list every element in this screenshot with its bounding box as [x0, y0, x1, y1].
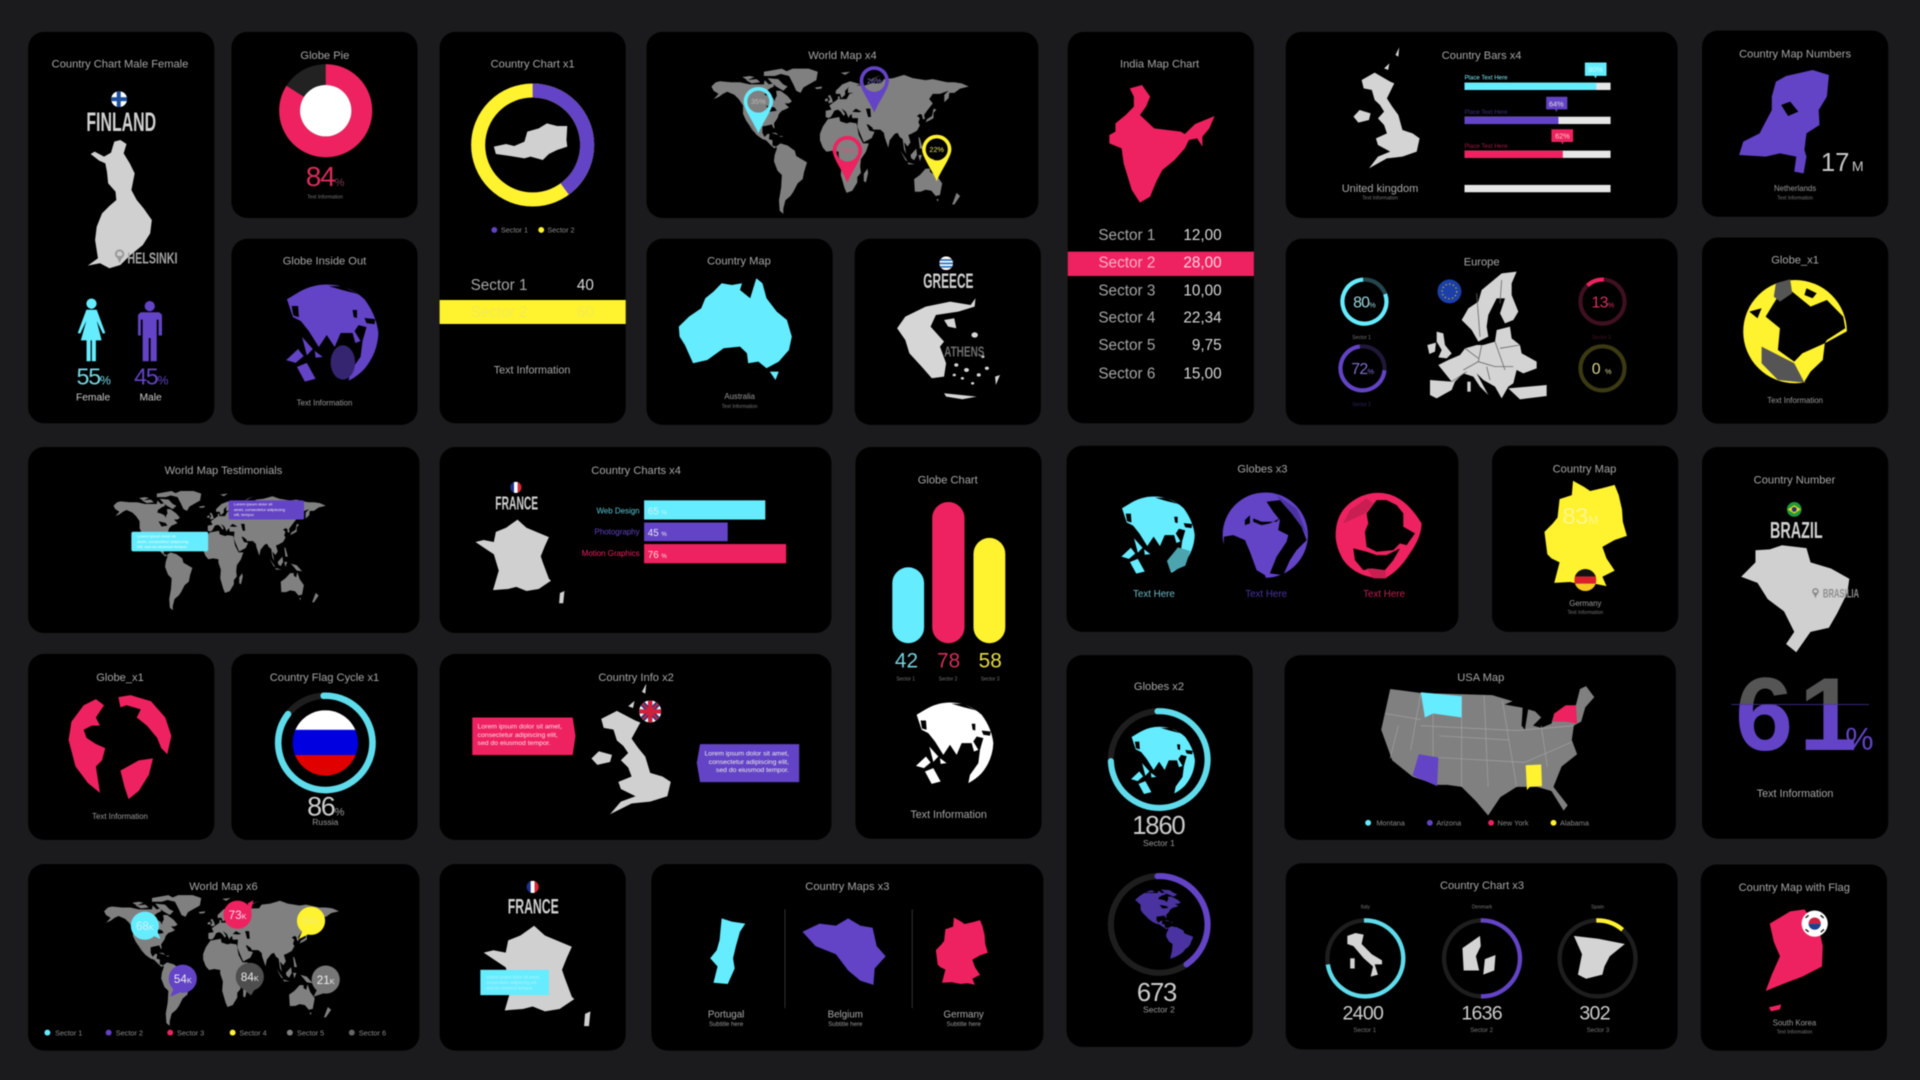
globe: purple	[286, 285, 378, 382]
callout: cyan: sed do eiusmod tempor.	[486, 985, 533, 990]
chart: ring 80%	[1336, 273, 1393, 341]
chart: horizontal bars: 65 %	[648, 506, 667, 517]
panel: Globe_x1 pink: Globe_x1	[96, 672, 144, 684]
chart: ring 86%	[277, 694, 374, 792]
panel: Country Bars x4: Country Bars x4	[1442, 50, 1522, 62]
chart: pill bars	[892, 502, 1005, 682]
chart: Italy ring: Italy	[1361, 905, 1370, 911]
panel: Globes x2: Sector 1	[1143, 838, 1175, 848]
labels	[708, 1010, 984, 1028]
chart: Denmark ring: 1636	[1461, 1003, 1503, 1025]
stat: 83M: 83M	[1562, 503, 1599, 529]
bubble: 21K: 21K	[317, 974, 335, 987]
globe: pink	[69, 695, 171, 799]
legend	[44, 1028, 386, 1037]
panel: Globes x2: Sector 2	[1143, 1005, 1175, 1015]
heading: Brazil: BRAZIL	[1770, 517, 1823, 543]
chart: ring 0%: 0 %	[1592, 361, 1612, 378]
heading: France: FRANCE	[508, 895, 559, 918]
chart: bars: 64%	[1549, 100, 1564, 109]
heading: Finland: FINLAND	[86, 107, 156, 137]
stat: 61%: %	[1845, 720, 1874, 756]
panel: Country Chart Male Female	[28, 32, 214, 423]
label: Brasilia: BRASILIA	[1823, 587, 1859, 601]
panel: World Map Testimonials	[28, 447, 419, 633]
panel: World Map x4	[647, 32, 1038, 218]
map: Netherlands	[1739, 70, 1829, 173]
legend: Sector 5	[297, 1028, 324, 1037]
panel: Country Flag Cycle x1: Country Flag Cycle x1	[270, 672, 379, 684]
panel: Country Chart Male Female: Country Chart Male Female	[52, 58, 188, 70]
panel: USA Map	[1284, 655, 1676, 840]
bubble: 68K: 68K	[136, 920, 154, 933]
bubble: 84K	[236, 963, 264, 996]
panel: Country Chart x1: Country Chart x1	[491, 58, 575, 70]
panel: Country Charts x4: Country Charts x4	[591, 465, 681, 477]
panel: Country Map Germany: Germany	[1569, 599, 1602, 608]
panel: Country Map Australia: Text Information	[722, 404, 758, 410]
table: sector rows: 60	[577, 304, 594, 321]
table: sector rows	[440, 277, 626, 324]
globe: cyan	[1121, 497, 1195, 574]
callout: cyan	[480, 970, 549, 995]
panel: Globe_x1 yellow: Text Information	[1767, 396, 1823, 405]
legend: Sector 2	[547, 226, 575, 235]
panel: Country Flag Cycle x1	[231, 654, 418, 840]
icon: Greece flag	[939, 256, 953, 270]
labels: Subtitle here	[709, 1021, 744, 1028]
callout: cyan: amet, consectetur adipiscing	[137, 539, 188, 544]
panel: Country Map Australia: Country Map	[707, 255, 771, 267]
legend: Alabama	[1560, 818, 1590, 827]
legend: Arizona	[1436, 818, 1462, 827]
panel: Country Flag Cycle x1: Russia	[312, 817, 339, 827]
stat: 86%: 86%	[307, 792, 345, 822]
pin: cyan	[744, 87, 773, 133]
panel: Country Number	[1702, 447, 1888, 839]
globe: pink	[1336, 493, 1422, 578]
callout: pink: sed do eiusmod tempor.	[478, 740, 551, 747]
stat: male 45%: 45%	[134, 363, 168, 389]
bubble: 68K	[131, 912, 160, 940]
legend: Sector 2	[116, 1028, 143, 1037]
chart: horizontal bars	[582, 500, 786, 563]
panel: Country Map with Flag: South Korea	[1773, 1019, 1817, 1028]
callout: purple	[229, 500, 304, 520]
panel: Globes x3	[1067, 446, 1458, 632]
chart: bars	[1464, 62, 1611, 192]
map: Germany yellow	[1544, 481, 1627, 586]
table: sector values: Sector 1	[1098, 227, 1155, 244]
panel: Country Map Numbers	[1702, 31, 1888, 217]
panel: Country Number: Text Information	[1757, 788, 1833, 800]
panel: Globe Pie: Text Information	[307, 194, 343, 200]
map: Belgium	[802, 918, 886, 985]
labels: Germany	[944, 1010, 984, 1021]
map: Portugal	[710, 918, 745, 984]
icon: Germany flag	[1574, 569, 1596, 591]
panel: Globe_x1 yellow	[1702, 238, 1888, 424]
map: Germany pink	[936, 918, 988, 985]
legend: Sector 1	[55, 1028, 82, 1037]
chart: Denmark ring	[1443, 905, 1521, 1034]
labels: Portugal	[708, 1010, 744, 1021]
callout: cyan	[131, 532, 208, 551]
panel: Globes x3: Text Here	[1133, 589, 1175, 600]
panel: Globe_x1 pink: Text Information	[92, 812, 148, 821]
bubble: 84K: 84K	[241, 971, 259, 984]
heading: Greece: GREECE	[923, 270, 974, 293]
bubble: 73K: 73K	[229, 909, 247, 922]
chart: pill bars: Sector 1	[896, 676, 915, 682]
map: USA	[1381, 686, 1594, 815]
panel: Globes x2: 673	[1137, 979, 1177, 1007]
chart: ring 80%: 80%	[1353, 294, 1376, 311]
legend: Montana	[1376, 818, 1406, 827]
panel: Globe Pie: Globe Pie	[300, 50, 349, 62]
table: sector values: 10,00	[1183, 283, 1222, 300]
table: sector values: Sector 5	[1098, 337, 1155, 354]
panel: Country Map Australia	[647, 239, 833, 425]
map: Europe	[1427, 272, 1547, 399]
chart: bars: 90%	[1588, 65, 1603, 74]
panel: Globe Inside Out: Globe Inside Out	[283, 255, 367, 267]
legend	[491, 226, 575, 235]
panel: Globe Chart: Globe Chart	[918, 475, 979, 487]
callout: cyan: Lorem ipsum dolor sit amet,	[486, 974, 540, 979]
panel: Country Chart x3	[1286, 863, 1678, 1049]
callout: purple: elit, tempor.	[234, 512, 255, 517]
panel: Greece	[855, 239, 1041, 425]
callout: purple: amet, consectetur adipiscing	[234, 507, 285, 512]
callout: pink	[472, 718, 576, 755]
icon: South Korea flag	[1802, 911, 1828, 937]
chart: horizontal bars: Motion Graphics	[582, 549, 640, 558]
map: Australia	[679, 278, 792, 380]
label: female: Female	[76, 392, 110, 403]
table: sector values: Sector 6	[1098, 365, 1155, 382]
panel: Globe Pie	[231, 32, 418, 218]
chart: ring with Austria	[478, 90, 587, 199]
callout: pink: consectetur adipiscing elit,	[478, 732, 558, 739]
map: Greece	[897, 298, 1000, 399]
label: Helsinki	[116, 250, 178, 267]
panel: Country Bars x4: Text Information	[1362, 196, 1398, 202]
chart: Spain ring: Sector 3	[1587, 1027, 1610, 1034]
panel: Country Map Numbers: Country Map Numbers	[1739, 49, 1851, 61]
panel: Globe Chart	[855, 447, 1042, 839]
heading: France: FRANCE	[495, 492, 538, 513]
callout: pink: Lorem ipsum dolor sit amet,	[478, 724, 562, 731]
bubble: 94K: 94K	[302, 915, 320, 928]
chart: ring 72%: Sector 2	[1352, 402, 1371, 408]
chart: bars: 62%	[1555, 131, 1570, 140]
stat: female 55%: 55%	[77, 363, 111, 389]
icon: France flag	[527, 881, 539, 893]
map: United Kingdom	[1353, 47, 1420, 168]
panel: France	[440, 864, 626, 1051]
chart: pill bars: 78	[937, 650, 960, 673]
panel: Globe Inside Out	[231, 239, 418, 425]
globe: purple	[1223, 492, 1308, 580]
table: sector values: Sector 4	[1098, 310, 1156, 327]
legend: Sector 3	[177, 1028, 204, 1037]
map: France	[475, 520, 564, 603]
chart: ring 13%: Sector 3	[1592, 335, 1611, 341]
chart: ring globe purple	[1109, 874, 1327, 975]
chart: Spain ring: 302	[1579, 1003, 1610, 1025]
table: sector values: 12,00	[1183, 227, 1222, 244]
panel: Globes x2	[1067, 655, 1327, 1047]
panel: Country Chart x1: Text Information	[494, 364, 570, 376]
callout: purple: Lorem ipsum dolor sit amet,	[705, 751, 789, 758]
table: sector values: 28,00	[1183, 255, 1222, 272]
label: Brasilia	[1813, 587, 1859, 601]
pin: cyan: 35%	[751, 97, 766, 106]
panel: Country Map with Flag	[1701, 864, 1887, 1051]
panel: Country Chart x3: Country Chart x3	[1440, 880, 1524, 892]
callout: purple: Lorem ipsum dolor sit	[234, 502, 273, 507]
panel: Europe: Europe	[1464, 257, 1500, 269]
map: South Korea	[1766, 909, 1823, 1011]
chart: horizontal bars: 45 %	[648, 528, 667, 539]
panel: India Map Chart: India Map Chart	[1120, 58, 1200, 70]
icon: EU flag	[1437, 279, 1461, 303]
stat: 61%: 61	[1735, 657, 1857, 773]
panel: Country Map with Flag: Text Information	[1777, 1029, 1813, 1035]
pin: yellow: 22%	[929, 145, 945, 154]
panel: World Map x6	[28, 864, 419, 1051]
chart: ring 72%	[1339, 344, 1386, 408]
panel: Country Map Germany: Country Map	[1553, 464, 1616, 476]
panel: Country Map Australia: Australia	[724, 392, 755, 401]
pin: purple	[860, 66, 889, 113]
callout: purple: consectetur adipiscing elit,	[709, 759, 789, 766]
panel: Country Info x2	[440, 654, 831, 840]
panel: World Map x6: World Map x6	[189, 881, 258, 893]
panel: Europe	[1286, 239, 1678, 425]
pin: purple: 26%	[867, 76, 882, 85]
stat: 17M: 17M	[1821, 149, 1864, 177]
callout: cyan: consectetur adipiscing elit,	[486, 980, 538, 985]
chart: ring 13%	[1571, 270, 1634, 341]
globe: yellow	[1743, 279, 1849, 387]
chart: ring 13%: 13%	[1591, 294, 1615, 311]
legend: Sector 4	[239, 1028, 267, 1037]
table: sector values: Sector 3	[1098, 283, 1155, 300]
table: sector rows: 40	[577, 277, 594, 294]
chart: pill bars: 42	[895, 650, 918, 673]
panel: World Map Testimonials: World Map Testimonials	[165, 465, 283, 477]
chart: Denmark ring: Sector 2	[1470, 1027, 1494, 1034]
chart: ring 0%	[1580, 346, 1625, 390]
panel: Globe_x1 pink	[28, 654, 214, 840]
icon: France flag	[510, 482, 522, 493]
panel: Country Map Numbers: Text Information	[1777, 196, 1813, 202]
pin: yellow	[922, 135, 951, 181]
panel: Globes x3: Text Here	[1245, 589, 1287, 600]
label: Helsinki: HELSINKI	[127, 250, 178, 267]
stat: 84%: 84%	[306, 161, 345, 192]
pin: pink	[833, 136, 862, 182]
callout: purple	[697, 744, 799, 782]
legend	[1365, 818, 1590, 827]
panel: Country Map Germany: Text Information	[1568, 610, 1603, 616]
panel: Globes x2: 1860	[1132, 812, 1185, 840]
bubble: 54K: 54K	[174, 973, 192, 986]
panel: Globes x2: Globes x2	[1134, 681, 1184, 693]
table: sector values: Sector 2	[1098, 255, 1155, 272]
chart: horizontal bars: 76 %	[648, 550, 667, 561]
label: male: Male	[139, 392, 162, 403]
panel: India Map Chart	[1068, 32, 1254, 423]
chart: Italy ring: Sector 1	[1353, 1027, 1377, 1034]
table: sector values: 22,34	[1183, 310, 1222, 327]
map: France	[484, 926, 590, 1026]
chart: Italy ring: 2400	[1343, 1003, 1384, 1025]
icon: female figure	[78, 299, 105, 361]
chart: donut 84%	[290, 75, 362, 147]
chart: Italy ring	[1326, 905, 1405, 1034]
panel: Country Charts x4	[440, 447, 831, 633]
icon: Russia flag	[293, 710, 358, 776]
map: Finland	[88, 140, 152, 268]
icon: male figure	[138, 301, 162, 361]
panel: World Map x4: World Map x4	[808, 50, 877, 62]
panel: Country Info x2: Country Info x2	[598, 672, 674, 684]
legend: Sector 1	[501, 226, 528, 235]
panel: Globe Chart: Text Information	[910, 809, 987, 821]
map: Brazil	[1741, 545, 1849, 652]
panel: USA Map: USA Map	[1457, 672, 1504, 684]
chart: horizontal bars: Web Design	[596, 506, 640, 515]
stat: 61%	[1731, 676, 1874, 752]
callout: purple: sed do eiusmod tempor.	[716, 767, 789, 774]
chart: Denmark ring: Denmark	[1472, 905, 1493, 911]
panel: Country Chart x1	[440, 32, 626, 423]
map: world	[104, 895, 339, 1026]
panel: Country Map with Flag: Country Map with Flag	[1739, 882, 1850, 894]
table: sector values: 15,00	[1183, 365, 1222, 382]
bubble: 54K	[169, 965, 197, 997]
map: world	[711, 69, 969, 214]
labels: Subtitle here	[828, 1021, 863, 1028]
panel: Country Bars x4	[1286, 32, 1678, 218]
icon: Brazil flag	[1787, 502, 1802, 517]
table: sector values: 9,75	[1192, 337, 1222, 354]
table: sector rows: Sector 1	[471, 277, 528, 294]
chart: ring 72%: 72%	[1351, 361, 1374, 378]
globe: white	[916, 702, 993, 784]
chart: ring globe cyan	[1109, 710, 1209, 810]
panel: Country Maps x3: Country Maps x3	[805, 881, 889, 893]
bubble: 73K	[223, 900, 253, 929]
map: world	[113, 491, 326, 610]
chart: pill bars: Sector 2	[939, 676, 958, 682]
label: Athens: ATHENS	[944, 344, 985, 360]
chart: Spain ring: Spain	[1591, 905, 1604, 911]
panel: Country Maps x3	[651, 864, 1043, 1051]
chart: bars: Place Text Here	[1464, 109, 1508, 116]
panel: Country Number: Country Number	[1754, 475, 1836, 487]
pin: pink: 76%	[840, 146, 855, 155]
chart: pill bars: Sector 3	[981, 676, 1000, 682]
stat: 61%: 61	[1735, 657, 1857, 773]
legend: New York	[1498, 818, 1529, 827]
map: United Kingdom	[591, 684, 671, 814]
chart: bars: Place Text Here	[1464, 75, 1508, 82]
chart: Spain ring	[1558, 905, 1637, 1034]
panel: Country Bars x4: United kingdom	[1342, 183, 1418, 195]
table: sector values	[1068, 227, 1254, 382]
icon: UK flag	[639, 700, 661, 722]
labels: Subtitle here	[947, 1021, 981, 1028]
panel: Country Map Germany	[1492, 446, 1678, 632]
legend: Sector 6	[359, 1028, 386, 1037]
icon: Finland flag	[111, 91, 127, 107]
callout: cyan: elit, sed do eiusmod tempor.	[137, 544, 188, 549]
panel: Globe Inside Out: Text Information	[297, 398, 352, 407]
table: sector rows: Sector 2	[471, 304, 528, 321]
bubble: 21K	[312, 966, 340, 997]
chart: bars: Place Text Here	[1464, 143, 1508, 150]
map: India	[1109, 85, 1215, 203]
chart: horizontal bars: Photography	[595, 527, 640, 536]
labels: Belgium	[828, 1010, 863, 1021]
chart: ring 80%: Sector 1	[1352, 335, 1371, 341]
chart: pill bars: 58	[979, 650, 1002, 673]
callout: cyan: Lorem ipsum dolor sit	[137, 534, 177, 539]
panel: Globes x3: Text Here	[1363, 589, 1405, 600]
panel: Globes x3: Globes x3	[1237, 464, 1287, 476]
bubble: 94K	[297, 907, 325, 939]
panel: Country Map Numbers: Netherlands	[1774, 184, 1816, 193]
panel: Globe_x1 yellow: Globe_x1	[1771, 254, 1819, 266]
